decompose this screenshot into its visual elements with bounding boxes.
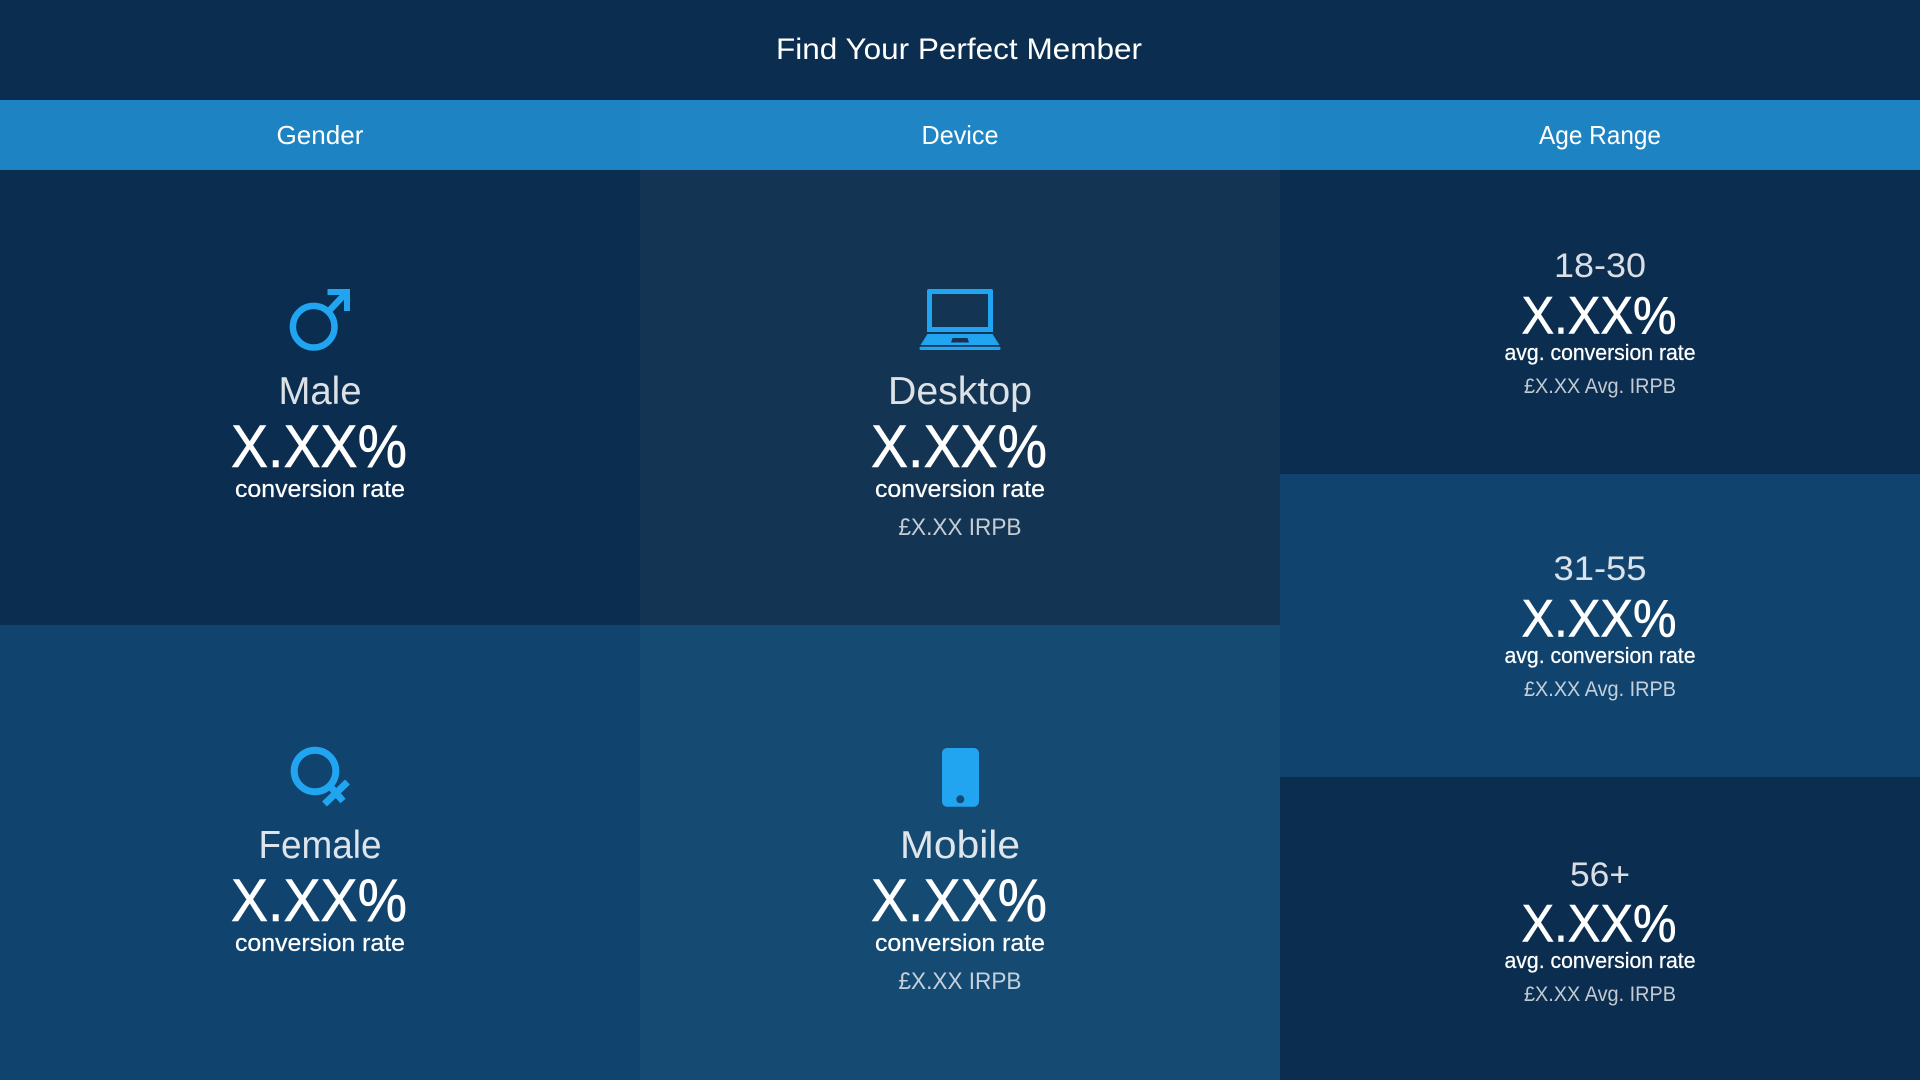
panel: female: [0, 625, 640, 1080]
caption: age 56+ conversion: avg. conversion rate: [1504, 948, 1696, 973]
note: mobile IRPB: £X.XX IRPB: [898, 968, 1022, 995]
caption: age 18-30 conversion: avg. conversion rate: [1504, 340, 1696, 365]
icon: female symbol: [294, 750, 348, 804]
column heading: gender: Gender: [276, 120, 364, 150]
column heading: age range: Age Range: [1539, 120, 1661, 150]
stat: mobile conversion: X.XX%: [871, 867, 1047, 934]
icon: phone: [942, 748, 979, 807]
stat: desktop conversion: X.XX%: [871, 413, 1047, 480]
label: female: Female: [258, 824, 382, 867]
stat: age 31-55 conversion: X.XX%: [1522, 590, 1676, 648]
caption: desktop conversion: conversion rate: [875, 476, 1045, 503]
icon: laptop: [920, 289, 1000, 350]
note: desktop IRPB: £X.XX IRPB: [898, 514, 1022, 541]
panel: mobile: [640, 625, 1280, 1080]
note: age 31-55 IRPB: £X.XX Avg. IRPB: [1524, 678, 1676, 701]
label: mobile: Mobile: [900, 824, 1020, 867]
label: age 31-55: 31-55: [1554, 550, 1646, 588]
panel: age 56+: [1280, 777, 1920, 1080]
label: age 56+: 56+: [1570, 856, 1630, 894]
stat: age 18-30 conversion: X.XX%: [1522, 286, 1676, 346]
panel: desktop: [640, 170, 1280, 625]
stat: age 56+ conversion: X.XX%: [1522, 894, 1676, 954]
icon: male symbol: [293, 289, 350, 348]
label: age 18-30: 18-30: [1554, 247, 1646, 285]
panel: age 18-30: [1280, 170, 1920, 474]
note: age 18-30 IRPB: £X.XX Avg. IRPB: [1524, 375, 1676, 398]
stat: male conversion: X.XX%: [231, 413, 407, 480]
caption: male conversion: conversion rate: [235, 476, 405, 503]
column header band: [0, 100, 1920, 170]
panel: male: [0, 170, 640, 625]
stat: female conversion: X.XX%: [231, 867, 407, 934]
title bar: Find Your Perfect Member: [776, 33, 1142, 66]
caption: age 31-55 conversion: avg. conversion rate: [1504, 643, 1696, 668]
caption: mobile conversion: conversion rate: [875, 930, 1045, 957]
label: male: Male: [278, 370, 362, 413]
panel: age 31-55: [1280, 474, 1920, 777]
label: desktop: Desktop: [888, 370, 1032, 413]
column heading: device: Device: [922, 120, 998, 150]
caption: female conversion: conversion rate: [235, 930, 405, 957]
title bar: [0, 0, 1920, 100]
note: age 56+ IRPB: £X.XX Avg. IRPB: [1524, 983, 1676, 1006]
